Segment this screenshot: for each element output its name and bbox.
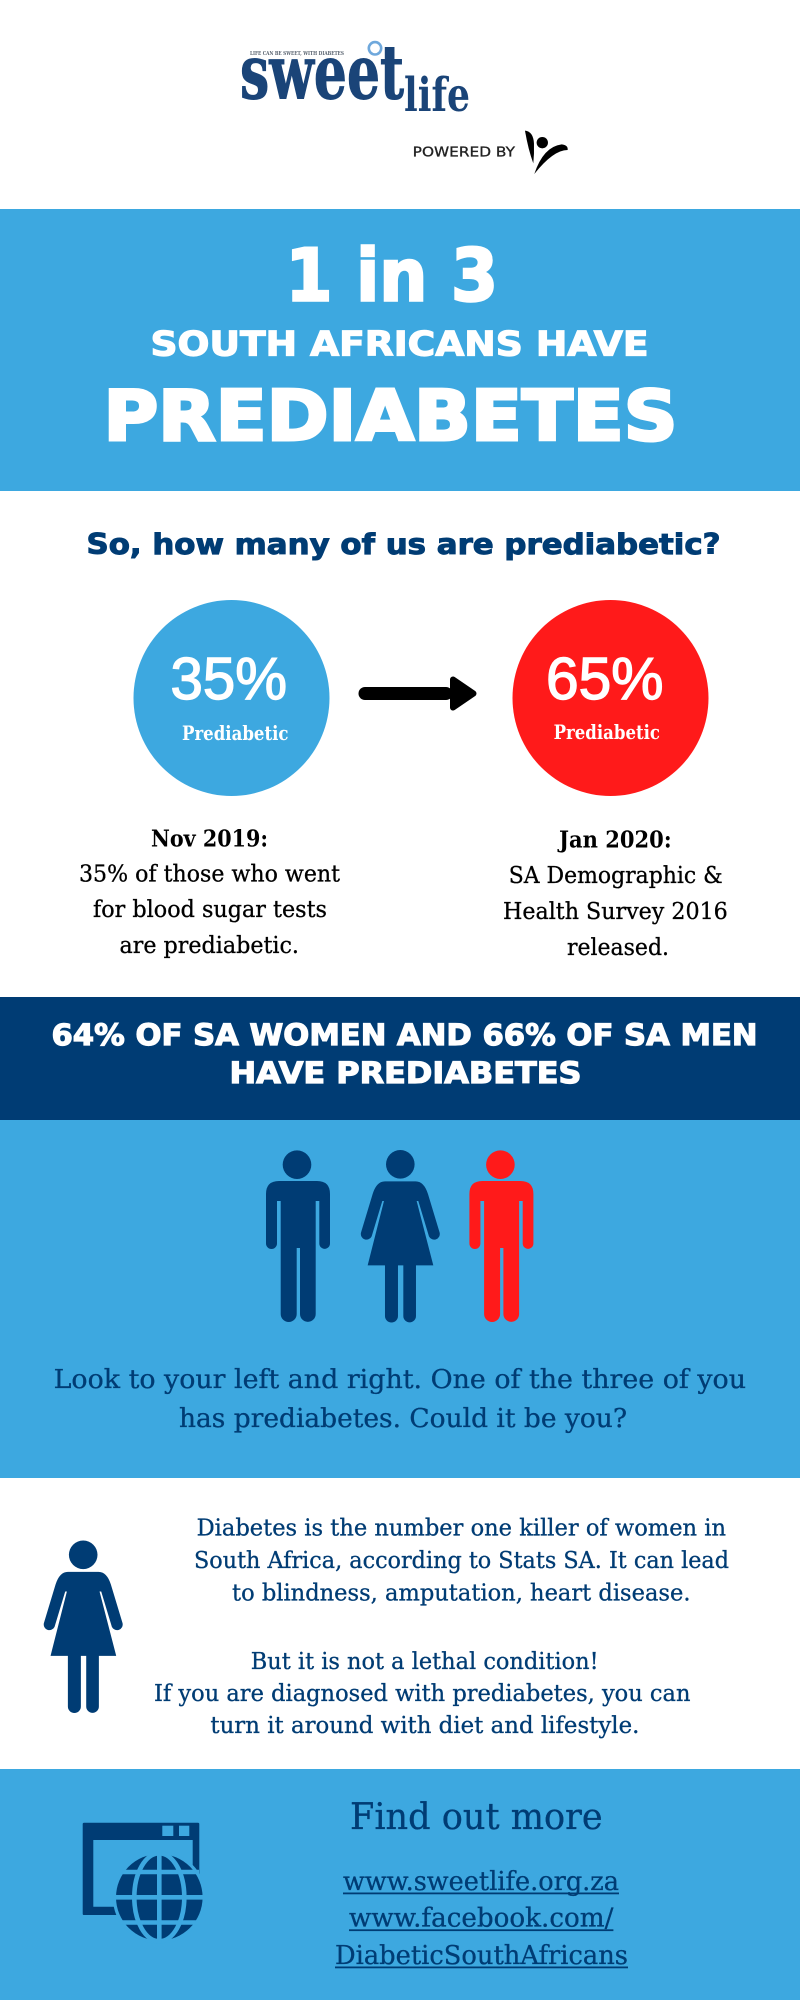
panel: look left and right bbox=[0, 1120, 800, 1478]
text block: Nov 2019: for blood sugar tests bbox=[93, 897, 327, 923]
logo: SweetLife: LIFE CAN BE SWEET, WITH DIABETES bbox=[250, 51, 344, 57]
text block: look to your left: has prediabetes. Could it be you? bbox=[179, 1404, 627, 1434]
text block: Nov 2019: Nov 2019: bbox=[151, 826, 268, 853]
icon: red man bbox=[469, 1150, 533, 1322]
stat circle: 35% bbox=[134, 600, 330, 796]
powered by mark bbox=[413, 131, 568, 174]
logo: SweetLife: sweet bbox=[240, 29, 404, 117]
text block: look to your left bbox=[54, 1365, 746, 1434]
title: Prediabetes: PREDIABETES bbox=[104, 376, 678, 457]
text block: Jan 2020: Jan 2020: bbox=[557, 827, 672, 854]
panel: how many are prediabetic bbox=[0, 491, 800, 997]
link: facebook bbox=[335, 1904, 628, 1971]
title: South Africans have: SOUTH AFRICANS HAVE bbox=[150, 324, 648, 364]
link: sweetlife: www.sweetlife.org.za bbox=[343, 1867, 619, 1897]
title: 1 in 3: 1 in 3 bbox=[286, 234, 498, 318]
icon: man bbox=[266, 1150, 330, 1322]
powered by mark: POWERED BY bbox=[413, 145, 516, 161]
heading: find out more: Find out more bbox=[350, 1797, 603, 1838]
text block: Jan 2020: released. bbox=[567, 935, 669, 961]
text block: Jan 2020: SA Demographic & bbox=[509, 863, 723, 889]
text block: killer of women: South Africa, according to Stats SA. It can lead bbox=[194, 1548, 729, 1574]
arrow bbox=[358, 680, 474, 708]
link: facebook: www.facebook.com/ bbox=[349, 1904, 614, 1934]
link: facebook: DiabeticSouthAfricans bbox=[335, 1941, 628, 1971]
stat circle: 35%: Prediabetic bbox=[182, 721, 288, 745]
icon: woman bbox=[361, 1150, 440, 1322]
panel: title banner bbox=[0, 209, 800, 491]
text block: killer of women bbox=[194, 1516, 729, 1607]
icon: woman bbox=[44, 1540, 123, 1713]
panel: women and men statistic band: 64% OF SA WOMEN AND 66% OF SA MEN bbox=[52, 1018, 758, 1052]
text block: not a lethal condition: If you are diagnosed with prediabetes, you can bbox=[154, 1681, 691, 1707]
text block: killer of women: to blindness, amputation, heart disease. bbox=[232, 1581, 690, 1607]
text block: not a lethal condition: turn it around with diet and lifestyle. bbox=[210, 1713, 639, 1739]
panel: women and men statistic band: HAVE PREDIABETES bbox=[230, 1056, 582, 1090]
panel: logo header bbox=[0, 0, 800, 209]
text block: Nov 2019 bbox=[79, 826, 341, 959]
text block: not a lethal condition: But it is not a lethal condition! bbox=[251, 1649, 599, 1675]
stat circle: 65%: 65% bbox=[546, 646, 664, 712]
icon: web browser and globe bbox=[83, 1823, 206, 1944]
logo: SweetLife: life bbox=[404, 68, 470, 123]
panel: find out more bbox=[0, 1769, 800, 2000]
stat circle: 35%: 35% bbox=[170, 646, 287, 712]
text block: not a lethal condition bbox=[154, 1649, 691, 1739]
heading: So, how many of us are prediabetic? bbox=[86, 528, 721, 561]
text block: look to your left: Look to your left and right. One of the three of you bbox=[54, 1365, 746, 1395]
stat circle: 65% bbox=[512, 600, 708, 796]
panel: women and men statistic band bbox=[0, 997, 800, 1120]
text block: Nov 2019: are prediabetic. bbox=[120, 933, 299, 959]
stat circle: 65%: Prediabetic bbox=[554, 720, 660, 744]
text block: Jan 2020: Health Survey 2016 bbox=[503, 899, 728, 925]
text block: Nov 2019: 35% of those who went bbox=[79, 862, 341, 888]
panel: diabetes killer of women bbox=[0, 1478, 800, 1769]
text block: Jan 2020 bbox=[503, 827, 728, 961]
text block: killer of women: Diabetes is the number one killer of women in bbox=[197, 1516, 726, 1542]
